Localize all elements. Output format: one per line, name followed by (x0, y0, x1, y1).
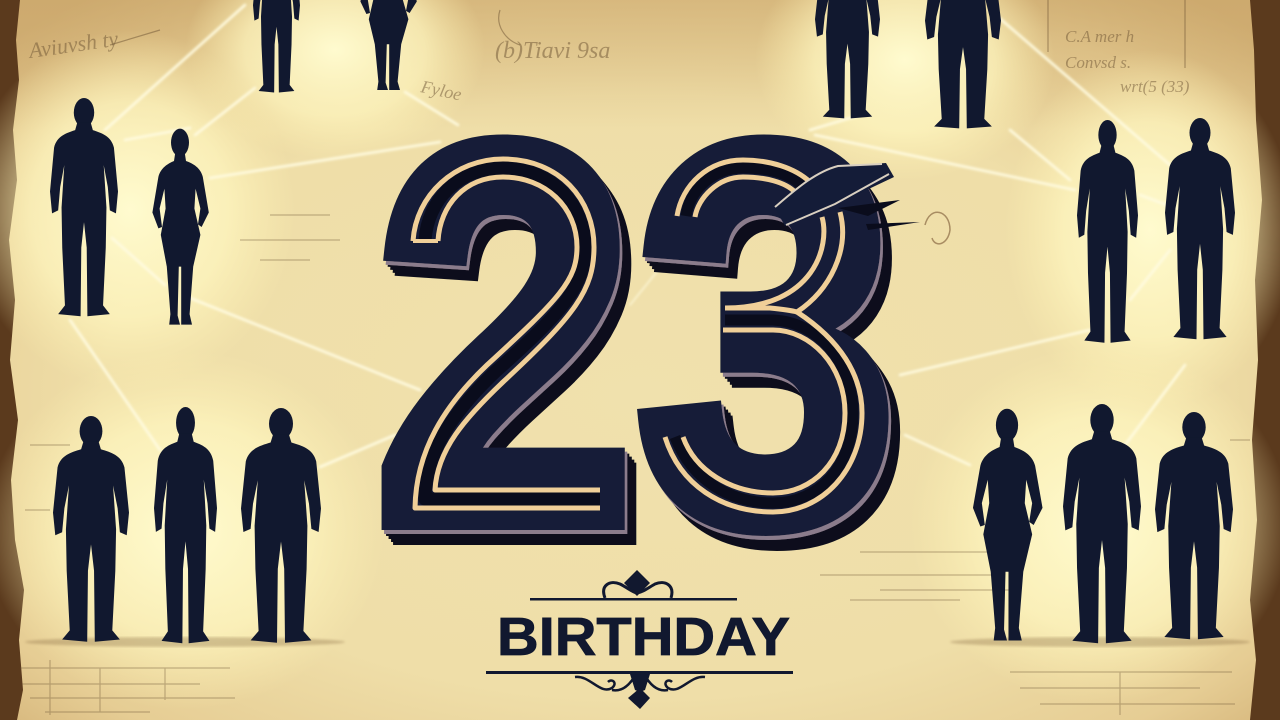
person (925, 0, 1001, 128)
person (1165, 118, 1235, 339)
top shading (0, 0, 1280, 130)
title: birthday: BIRTHDAY (497, 607, 790, 667)
ground shadows (25, 637, 1250, 647)
sketch lines lower corners (20, 215, 1250, 715)
digit 2: 2 (375, 36, 634, 633)
person (50, 98, 118, 316)
person (53, 416, 129, 642)
handwritten notes (25, 0, 1190, 244)
group: left people (50, 98, 209, 325)
torn right edge (1250, 0, 1280, 720)
handwritten notes: Convsd s. (1065, 53, 1131, 72)
person (152, 129, 209, 325)
network connection lines (70, 5, 1185, 467)
digit 3: 3 (637, 36, 896, 633)
person (1077, 120, 1138, 343)
group: right people (1077, 118, 1235, 343)
person (1155, 412, 1233, 639)
birthday emblem (486, 570, 793, 709)
inlay stripes on 3 (665, 160, 862, 512)
person (360, 0, 417, 90)
person (241, 408, 321, 643)
handwritten notes: (b)Tiavi 9sa (495, 38, 610, 64)
person (973, 409, 1043, 640)
group: bottom right people (973, 404, 1233, 643)
inlay stripes on 2 (413, 159, 600, 508)
person (815, 0, 880, 118)
handwritten notes: C.A mer h (1065, 27, 1134, 46)
handwritten notes: Aviuvsh ty (25, 26, 120, 63)
bottom ornament (486, 671, 793, 709)
person (1063, 404, 1141, 643)
handwritten notes: Fyloe (418, 76, 463, 104)
quill flourish on 3 (775, 163, 920, 230)
person (154, 407, 217, 643)
handwritten notes: wrt(5 (33) (1120, 77, 1190, 96)
group: top left people (253, 0, 417, 92)
torn left edge (0, 0, 24, 720)
big number 23 (375, 36, 920, 633)
person (253, 0, 300, 92)
group: bottom left people (53, 407, 321, 643)
group: top right people (815, 0, 1001, 128)
top ornament (530, 570, 737, 600)
